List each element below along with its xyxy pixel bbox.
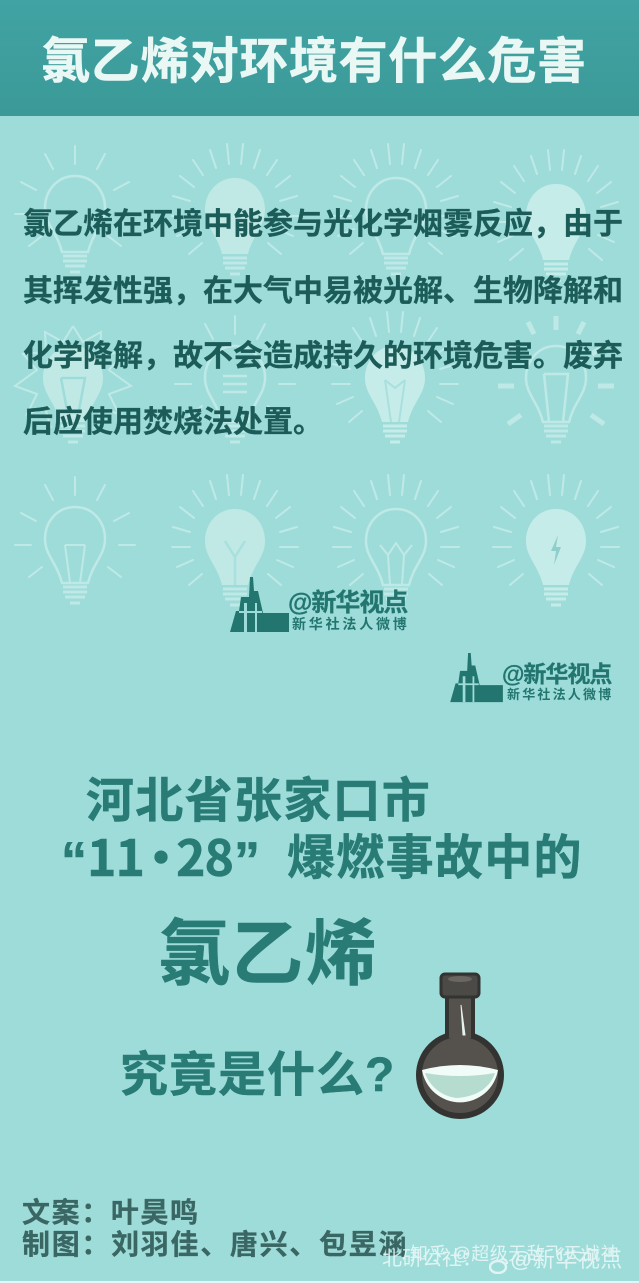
icon: bulb row 1 column 1 bbox=[15, 146, 135, 272]
logo subtitle: 新华社法人微博 bbox=[292, 616, 410, 632]
icon: bulb row 3 column 1 bbox=[15, 477, 135, 603]
cover heading line 1: 河北省张家口市 bbox=[86, 775, 431, 828]
bottom edge bbox=[0, 1281, 639, 1283]
date number 11: 11 bbox=[87, 819, 144, 891]
icon: tower logo bbox=[230, 577, 289, 632]
icon: tower logo bbox=[450, 653, 503, 702]
watermark bbox=[382, 1244, 623, 1274]
header band bbox=[0, 0, 639, 116]
credit: design: 制图：刘羽佳、唐兴、包昱涵 bbox=[22, 1229, 408, 1260]
icon: bulb row 2 column 1 bbox=[15, 326, 131, 442]
icon: bulb row 2 column 3 bbox=[332, 312, 458, 442]
logo: Xinhua Viewpoint lower bbox=[450, 653, 613, 702]
icon: bulb row 3 column 2 bbox=[172, 475, 298, 605]
date number 28: 28 bbox=[176, 819, 233, 891]
credits bbox=[22, 1197, 408, 1260]
closing quote: ” bbox=[234, 832, 260, 890]
logo handle: @新华视点 bbox=[502, 661, 611, 687]
icon: bulb row 3 column 4 bbox=[493, 475, 619, 605]
watermark handle: @新华视点 bbox=[510, 1247, 623, 1272]
icon: bulb row 1 column 3 bbox=[333, 144, 459, 274]
cover heading: vinyl chloride: 氯乙烯 bbox=[158, 915, 378, 995]
paragraph line 4: 后应使用焚烧法处置。 bbox=[23, 406, 323, 439]
icon: bulb row 1 column 4 bbox=[493, 150, 619, 280]
cover heading question: 究竟是什么? bbox=[120, 1049, 395, 1102]
body paragraph bbox=[23, 208, 623, 439]
watermark text lower: 北研公社： bbox=[382, 1248, 482, 1270]
icon: weibo bbox=[489, 1258, 508, 1274]
cover heading line 2 bbox=[61, 819, 583, 891]
credit: copy: 文案：叶昊鸣 bbox=[22, 1197, 200, 1228]
paragraph line 1: 氯乙烯在环境中能参与光化学烟雾反应，由于 bbox=[23, 208, 623, 241]
icon: bulb row 2 column 2 bbox=[175, 316, 295, 442]
background light bulbs pattern bbox=[13, 143, 620, 606]
date separator: · bbox=[136, 819, 186, 891]
paragraph line 2: 其挥发性强，在大气中易被光解、生物降解和 bbox=[23, 275, 623, 308]
icon: bulb row 3 column 3 bbox=[333, 475, 459, 605]
icon: bulb row 1 column 2 bbox=[172, 144, 298, 274]
logo subtitle: 新华社法人微博 bbox=[507, 687, 613, 702]
paragraph line 3: 化学降解，故不会造成持久的环境危害。废弃 bbox=[23, 340, 623, 373]
logo handle: @新华视点 bbox=[288, 589, 407, 617]
title: 氯乙烯对环境有什么危害 bbox=[41, 35, 587, 89]
watermark text upper: 知乎 @超级无敌飞天战神 bbox=[410, 1244, 619, 1264]
opening quote: “ bbox=[61, 832, 87, 890]
icon: flask bbox=[416, 972, 504, 1119]
logo: Xinhua Viewpoint upper bbox=[230, 577, 410, 632]
icon: bulb row 2 column 4 bbox=[498, 316, 614, 442]
cover heading line 2 text: 爆燃事故中的 bbox=[287, 832, 583, 885]
